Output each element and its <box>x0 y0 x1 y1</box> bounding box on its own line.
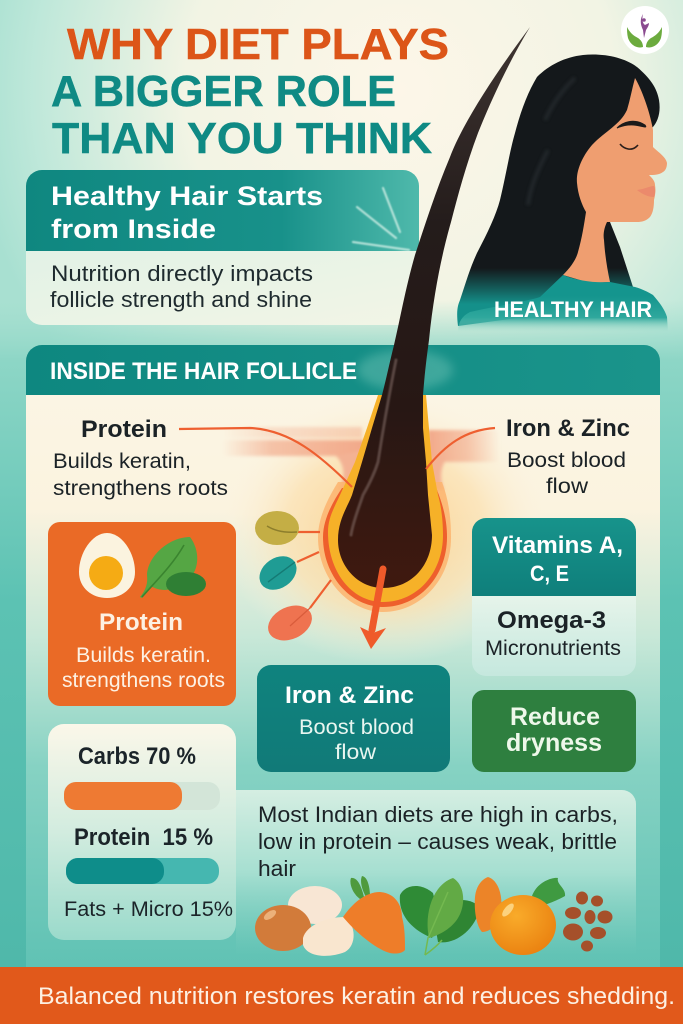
down arrow <box>360 569 386 649</box>
halo <box>318 482 451 612</box>
omega text <box>485 607 621 660</box>
brown egg <box>255 905 311 951</box>
label: protein: strengthens roots <box>53 476 228 500</box>
panel heading: Healthy Hair Starts <box>51 181 323 211</box>
skin layer <box>222 427 500 490</box>
woman with healthy hair <box>457 55 668 332</box>
panel: diet note <box>236 790 636 955</box>
footer banner <box>0 967 683 1024</box>
icon: spinach leaf <box>140 537 206 598</box>
vitamins text: Vitamins A, <box>492 532 623 559</box>
carbs label: Carbs 70 % <box>78 743 196 770</box>
carbs bar <box>64 782 220 810</box>
label: iron and zinc: Iron & Zinc <box>506 415 630 442</box>
vitamins text: C, E <box>530 561 569 586</box>
panel text: Nutrition directly impacts <box>51 261 313 286</box>
card: reduce dryness: Reduce <box>510 703 600 731</box>
food illustration <box>255 876 612 956</box>
label: iron and zinc: Boost blood <box>507 448 626 472</box>
title: A BIGGER ROLE <box>51 67 396 116</box>
glow around the follicle strand <box>357 350 453 390</box>
card: iron and zinc: Boost blood <box>299 715 414 739</box>
panel text: follicle strength and shine <box>50 287 312 312</box>
card: iron and zinc <box>257 665 450 772</box>
lips <box>637 186 655 197</box>
label: protein: Protein <box>81 416 167 443</box>
label: iron and zinc: flow <box>546 474 589 498</box>
card: reduce dryness <box>472 690 636 772</box>
card text: strengthens roots <box>62 669 225 692</box>
hair strand and bulb <box>338 27 530 588</box>
white egg <box>288 886 342 924</box>
label: protein <box>53 416 228 500</box>
note text: Most Indian diets are high in carbs, <box>258 802 618 827</box>
panel: healthy hair starts from inside <box>26 170 419 325</box>
section heading: INSIDE THE HAIR FOLLICLE <box>50 358 357 385</box>
omega text: Micronutrients <box>485 637 621 660</box>
top <box>458 275 668 332</box>
panel text <box>50 261 313 312</box>
title: WHY DIET PLAYS <box>67 20 449 69</box>
hair shine <box>528 78 575 205</box>
card: reduce dryness: dryness <box>506 729 602 757</box>
vitamins text <box>492 532 623 586</box>
note text: hair <box>258 856 296 881</box>
card text: Builds keratin. <box>76 644 211 667</box>
spinach <box>400 878 480 955</box>
protein bar <box>66 858 219 884</box>
nuts and seeds <box>563 892 612 952</box>
strand highlight <box>351 360 396 535</box>
note text: low in protein – causes weak, brittle <box>258 829 617 854</box>
omega text: Omega-3 <box>497 607 606 634</box>
card: protein <box>48 522 236 706</box>
orange <box>490 878 565 955</box>
neck and face <box>563 78 667 283</box>
title <box>51 20 449 163</box>
closed eye <box>620 144 638 149</box>
nutrient particles <box>253 511 318 647</box>
title: THAN YOU THINK <box>52 114 432 163</box>
panel heading: from Inside <box>51 214 216 244</box>
card text: Protein <box>99 609 183 636</box>
follicle illustration <box>318 27 530 649</box>
panel: inside the hair follicle <box>26 345 660 967</box>
healthy hair label: HEALTHY HAIR <box>494 297 652 322</box>
card: iron and zinc: flow <box>335 740 377 764</box>
protein label: Protein 15 % <box>74 824 213 851</box>
callout lines <box>179 428 495 608</box>
eyebrow <box>617 121 646 128</box>
warm tissue glow <box>220 395 550 665</box>
label: iron and zinc <box>506 415 630 498</box>
cream egg <box>303 917 354 956</box>
light burst <box>353 188 409 250</box>
footer banner: Balanced nutrition restores keratin and reduces shedding. <box>38 983 675 1010</box>
card text <box>62 609 225 692</box>
panel: macronutrient bars <box>48 724 236 940</box>
logo <box>621 6 669 54</box>
hair <box>457 55 660 326</box>
card: vitamins and omega-3 <box>472 518 636 676</box>
yellow sheath <box>328 395 443 602</box>
label: protein: Builds keratin, <box>53 449 191 473</box>
icon: egg <box>79 533 135 598</box>
carrot <box>343 876 405 954</box>
outer follicle line <box>323 488 447 607</box>
card: iron and zinc: Iron & Zinc <box>285 682 414 709</box>
note text <box>258 802 618 881</box>
panel heading <box>51 181 323 244</box>
fats and micro label: Fats + Micro 15% <box>64 897 233 921</box>
apricot slice <box>475 877 501 932</box>
